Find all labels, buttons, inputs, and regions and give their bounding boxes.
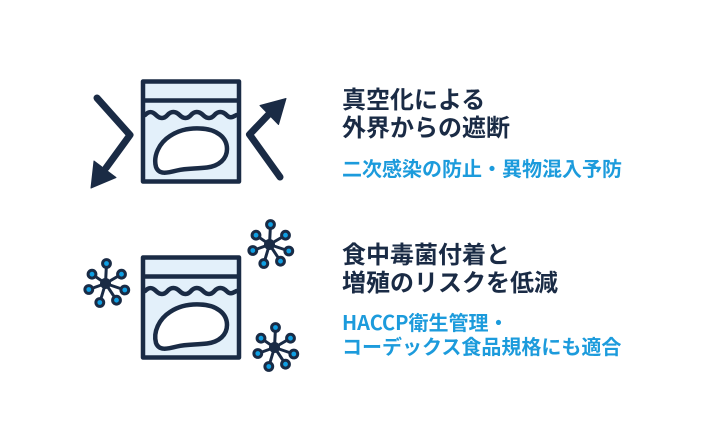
- heading: isolation: [342, 80, 510, 143]
- icon: right deflected arrow: [250, 98, 286, 177]
- text: HACCP compliance: コーデックス食品規格にも適合: [342, 331, 621, 360]
- icon: vacuum bag top: [143, 82, 239, 182]
- heading: isolation: 真空化による: [342, 80, 485, 115]
- icon: vacuum bag bottom: [143, 258, 239, 358]
- icon: bacterium upper right: [249, 221, 293, 267]
- text: HACCP compliance: [342, 307, 621, 360]
- text: HACCP compliance: HACCP衛生管理・: [342, 307, 509, 336]
- heading: bacteria risk: [342, 235, 558, 298]
- icon: left deflected arrow: [91, 98, 130, 188]
- icon: bacterium left: [85, 260, 129, 306]
- heading: isolation: 外界からの遮断: [342, 108, 510, 143]
- heading: bacteria risk: 増殖のリスクを低減: [342, 263, 558, 298]
- icon: bacterium lower right: [254, 324, 298, 370]
- text: contamination prevention: 二次感染の防止・異物混入予防: [342, 153, 622, 182]
- heading: bacteria risk: 食中毒菌付着と: [342, 235, 510, 270]
